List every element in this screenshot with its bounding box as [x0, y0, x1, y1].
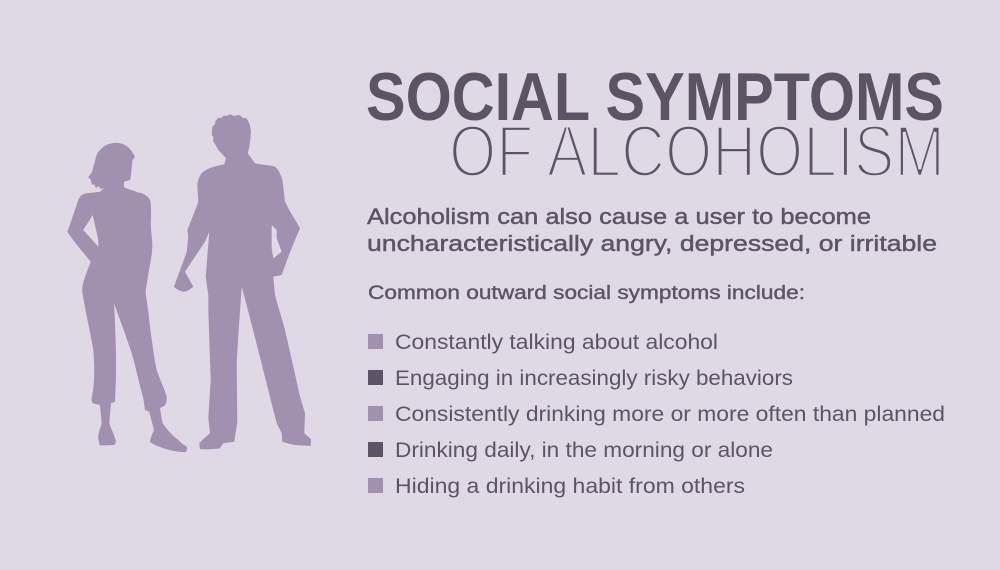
list item: drinking more than planned: Consistently drinking more or more often than planned — [395, 402, 945, 426]
title — [366, 59, 945, 193]
list item: risky behaviors: Engaging in increasingly risky behaviors — [395, 366, 793, 390]
list item: hiding a habit: Hiding a drinking habit from others — [395, 474, 745, 498]
list item: talking about alcohol: Constantly talking about alcohol — [395, 330, 718, 354]
illustration: silhouettes of a woman and a man — [67, 114, 311, 452]
silhouette: woman — [67, 143, 187, 452]
intro paragraph — [367, 204, 937, 256]
intro paragraph: Alcoholism can also cause a user to become — [367, 204, 871, 229]
symptom list — [368, 330, 945, 498]
intro paragraph: uncharacteristically angry, depressed, or irritable — [367, 231, 937, 256]
silhouette: man — [174, 114, 311, 449]
list item: drinking daily: Drinking daily, in the morning or alone — [395, 438, 773, 462]
list heading: Common outward social symptoms include: — [368, 282, 805, 304]
